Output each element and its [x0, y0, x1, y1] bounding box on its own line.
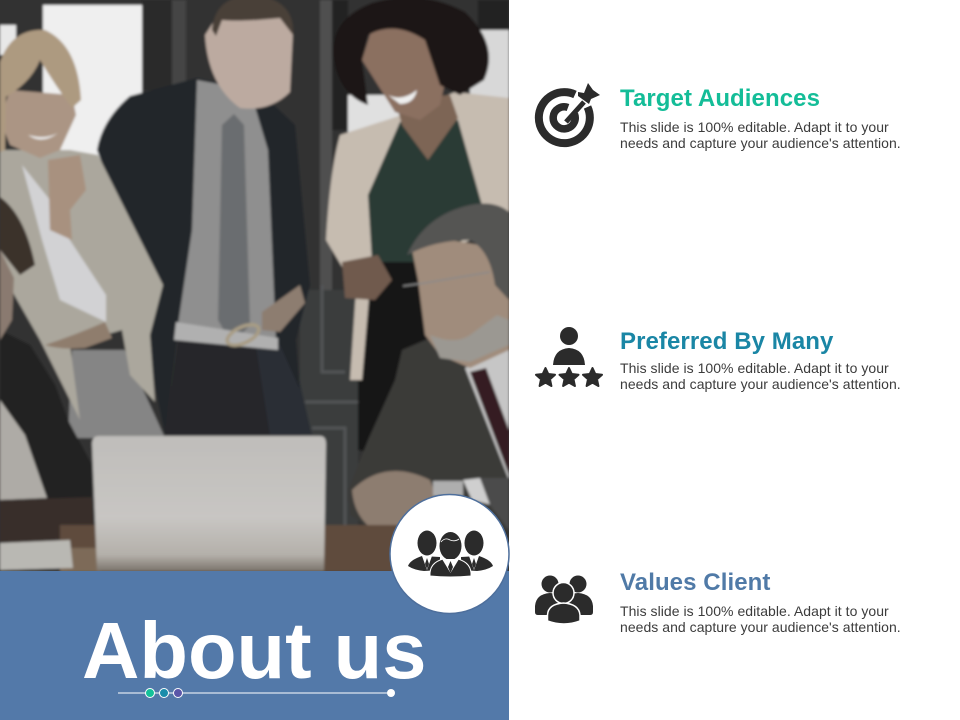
- decorative timeline with dots: [118, 688, 395, 698]
- seated man: [348, 338, 509, 535]
- woman right: [358, 258, 470, 470]
- table and notebook: [60, 525, 410, 572]
- icon: group of three people: [535, 576, 593, 624]
- laptop: [92, 436, 326, 571]
- text: Target Audiences description: needs and capture your audience's attention.: [620, 135, 901, 151]
- seated woman left: [0, 330, 92, 510]
- standing man: [165, 340, 312, 435]
- text: Target Audiences description: This slide is 100% editable. Adapt it to your: [620, 119, 889, 135]
- icon: team in white circle: [389, 494, 510, 614]
- woman left: [68, 350, 165, 438]
- heading: Values Client: Values Client: [620, 569, 770, 596]
- icon: person with three stars: [534, 327, 603, 387]
- text: Target Audiences description: [620, 119, 901, 151]
- text: Preferred By Many description: [620, 360, 901, 392]
- text: Values Client description: [620, 603, 901, 635]
- heading: Preferred By Many: Preferred By Many: [620, 328, 833, 355]
- text: Preferred By Many description: needs and capture your audience's attention.: [620, 376, 901, 392]
- icon: target with arrow: [534, 83, 600, 148]
- text: Values Client description: This slide is 100% editable. Adapt it to your: [620, 603, 889, 619]
- heading: Target Audiences: Target Audiences: [620, 85, 820, 112]
- text: Values Client description: needs and capture your audience's attention.: [620, 619, 901, 635]
- photo: business team around a laptop: [0, 0, 509, 571]
- text: Preferred By Many description: This slide is 100% editable. Adapt it to your: [620, 360, 889, 376]
- panel: blue title band: [0, 571, 509, 720]
- title: About us: [82, 606, 426, 695]
